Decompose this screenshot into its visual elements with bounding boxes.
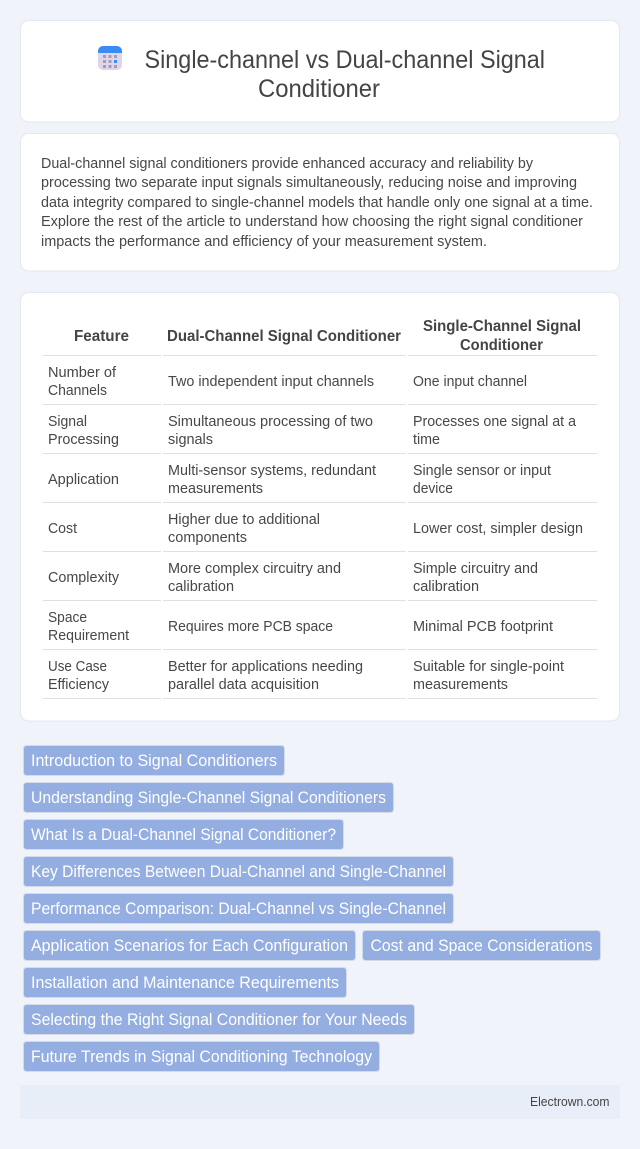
- tag: cost and space: [362, 930, 600, 960]
- row: use case efficiency: Use Case: [48, 659, 107, 675]
- tag: introduction: [24, 746, 284, 776]
- title: Single-channel vs Dual-channel Signal: [144, 46, 545, 74]
- row: complexity: calibration: [168, 579, 234, 595]
- tag: key differences: [24, 856, 454, 886]
- tag: what is dual-channel: What Is a Dual-Channel Signal Conditioner?: [31, 825, 336, 844]
- tag: selecting the right conditioner: Selecting the Right Signal Conditioner for Your Needs: [31, 1010, 407, 1029]
- tag: understanding single-channel: Understanding Single-Channel Signal Conditioners: [31, 788, 386, 807]
- row: space requirement: Space: [48, 610, 87, 626]
- table header row: Conditioner: [460, 337, 543, 354]
- row: number of channels: One input channel: [413, 374, 527, 390]
- row: signal processing: [43, 414, 597, 454]
- row: use case efficiency: [43, 659, 597, 699]
- row: cost: components: [168, 530, 247, 546]
- row: number of channels: Number of: [48, 365, 117, 381]
- row: complexity: More complex circuitry and: [168, 561, 341, 577]
- row: complexity: calibration: [413, 579, 479, 595]
- tag: understanding single-channel: [24, 782, 394, 812]
- row: cost: Cost: [48, 521, 77, 537]
- panel: introduction text: Dual-channel signal conditioners provide enhanced accuracy and reliability by: [41, 156, 534, 172]
- row: cost: Lower cost, simpler design: [413, 521, 583, 537]
- table header row: Single-Channel Signal: [423, 318, 581, 335]
- row: signal processing: Signal: [48, 414, 87, 430]
- row: cost: Higher due to additional: [168, 512, 320, 528]
- panel: introduction text: impacts the performance and efficiency of your measurement system.: [41, 234, 487, 250]
- title: Conditioner: [258, 75, 380, 103]
- tag: introduction: Introduction to Signal Conditioners: [31, 751, 277, 770]
- row: use case efficiency: Suitable for single-point: [413, 659, 564, 675]
- row: space requirement: [43, 610, 597, 650]
- tag: performance comparison: Performance Comparison: Dual-Channel vs Single-Channel: [31, 899, 446, 918]
- table header row: Dual-Channel Signal Conditioner: [167, 328, 401, 345]
- row: application: measurements: [168, 481, 263, 497]
- tag: application scenarios: Application Scenarios for Each Configuration: [31, 936, 348, 955]
- row: application: Multi-sensor systems, redundant: [168, 463, 376, 479]
- row: application: device: [413, 481, 453, 497]
- row: use case efficiency: Efficiency: [48, 677, 110, 693]
- panel: introduction text: Explore the rest of the article to understand how choosing the right signal conditioner: [41, 214, 583, 230]
- footer: [20, 1085, 620, 1119]
- row: number of channels: Two independent input channels: [168, 374, 374, 390]
- tag: performance comparison: [24, 894, 454, 924]
- row: use case efficiency: parallel data acquisition: [168, 677, 319, 693]
- row: complexity: Simple circuitry and: [413, 561, 538, 577]
- panel: introduction text: [20, 134, 620, 271]
- panel: header: [20, 20, 620, 122]
- row: space requirement: Minimal PCB footprint: [413, 619, 553, 635]
- row: space requirement: Requires more PCB space: [168, 619, 333, 635]
- row: application: Single sensor or input: [413, 463, 551, 479]
- icon: calendar grid: [98, 46, 122, 70]
- table header row: Feature: [74, 328, 129, 345]
- row: space requirement: Requirement: [48, 628, 129, 644]
- row: complexity: [43, 561, 597, 601]
- row: signal processing: Simultaneous processing of two: [168, 414, 373, 430]
- row: number of channels: Channels: [48, 383, 107, 399]
- tag: installation and maintenance: Installation and Maintenance Requirements: [31, 973, 339, 992]
- tag: future trends: Future Trends in Signal Conditioning Technology: [31, 1047, 373, 1066]
- row: application: [43, 463, 597, 503]
- panel: introduction text: data integrity compared to single-channel models that handle only one signal at a time.: [41, 195, 593, 211]
- row: cost: [43, 512, 597, 552]
- panel: introduction text: processing two separate input signals simultaneously, reducing noise and improving: [41, 175, 577, 191]
- topic tags: [24, 746, 600, 1072]
- row: number of channels: [43, 365, 597, 405]
- title: [144, 46, 545, 103]
- row: signal processing: Processes one signal at a: [413, 414, 577, 430]
- tag: cost and space: Cost and Space Considerations: [370, 936, 592, 955]
- row: use case efficiency: measurements: [413, 677, 508, 693]
- tag: future trends: [24, 1042, 380, 1072]
- row: signal processing: Processing: [48, 432, 119, 448]
- tag: installation and maintenance: [24, 968, 346, 998]
- tag: application scenarios: [24, 930, 356, 960]
- row: signal processing: time: [413, 432, 440, 448]
- panel: comparison table: [20, 292, 620, 721]
- tag: key differences: Key Differences Between Dual-Channel and Single-Channel: [31, 862, 446, 881]
- row: use case efficiency: Better for applications needing: [168, 659, 363, 675]
- tag: selecting the right conditioner: [24, 1004, 414, 1034]
- row: signal processing: signals: [168, 432, 213, 448]
- footer credit: Electrown.com: [530, 1094, 610, 1109]
- row: complexity: Complexity: [48, 570, 120, 586]
- tag: what is dual-channel: [24, 820, 344, 850]
- row: application: Application: [48, 472, 119, 488]
- table header row: [43, 318, 597, 356]
